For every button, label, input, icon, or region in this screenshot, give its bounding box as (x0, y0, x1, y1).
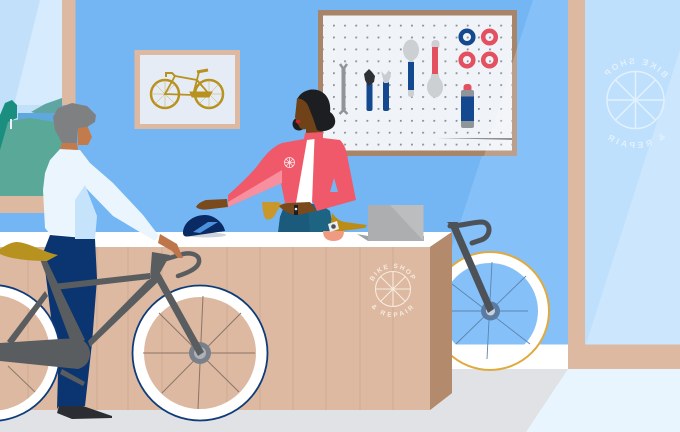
blue pliers (364, 69, 391, 111)
pegboard with tools (318, 10, 517, 156)
pink jacket (228, 132, 356, 211)
front wheel (132, 286, 268, 420)
wrench (340, 64, 348, 114)
mirrored logo (604, 58, 668, 148)
jacket logo (284, 158, 294, 168)
grey hair (53, 103, 96, 143)
front bike (0, 234, 268, 421)
counter logo (370, 264, 416, 318)
framed bicycle picture (134, 50, 240, 129)
mirrored logo: & REPAIR (608, 134, 665, 148)
handlebar (163, 253, 199, 276)
white shirt (43, 149, 159, 241)
left window (0, 0, 76, 213)
mirrored logo: BIKE SHOP (604, 58, 668, 78)
neck and face (60, 125, 92, 150)
right window with mirrored logo (568, 0, 680, 369)
white shirt (296, 139, 314, 203)
ring washers (461, 31, 496, 66)
paint brush tool (403, 40, 419, 97)
coffee bowl (323, 221, 344, 241)
shoe (57, 406, 112, 419)
hair and head (292, 89, 335, 141)
gold bag (330, 213, 367, 232)
pants (278, 204, 334, 233)
man's hand on bar (158, 234, 183, 258)
man customer (43, 103, 159, 419)
trousers (43, 235, 97, 409)
saddle (0, 242, 58, 261)
counter (0, 232, 452, 410)
counter logo: BIKE SHOP (370, 264, 416, 281)
rear bike (430, 222, 549, 410)
rear wheel (0, 285, 60, 421)
scraper tool (427, 40, 443, 98)
blue helmet (183, 215, 226, 238)
bottle (461, 84, 474, 128)
laptop (357, 205, 424, 241)
counter logo: & REPAIR (372, 304, 414, 318)
woman shopkeeper (196, 89, 356, 233)
frame (0, 252, 204, 386)
yellow mug (262, 202, 284, 220)
baseboard and floor (0, 344, 680, 432)
arms and hands (196, 199, 316, 215)
icon: gold bicycle (151, 70, 223, 108)
